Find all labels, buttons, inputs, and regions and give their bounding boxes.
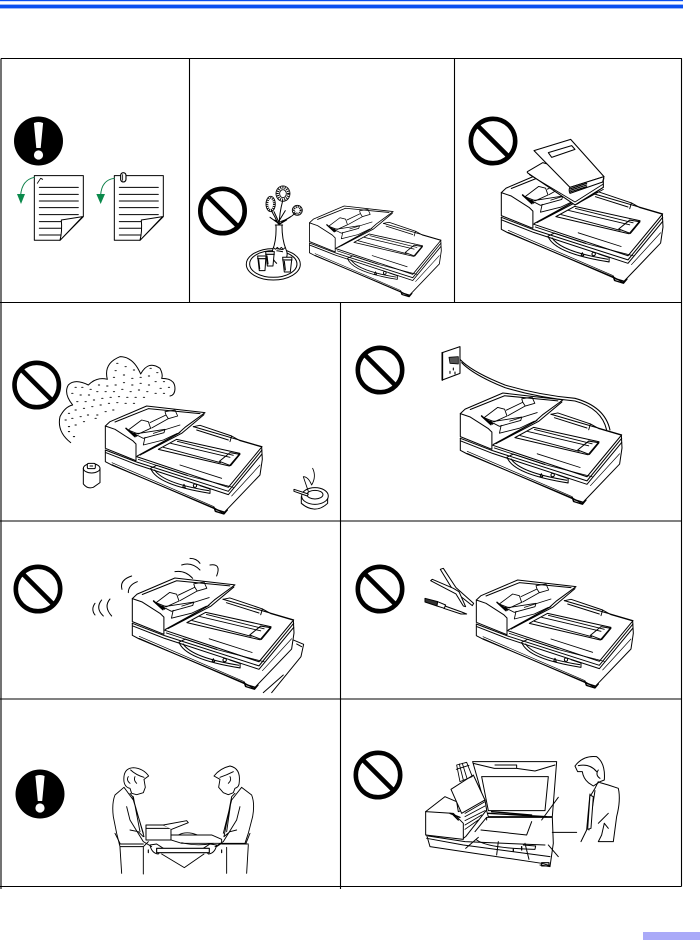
panel: smoke and dust [14,357,328,514]
panel: two people carrying [16,766,254,874]
icon: prohibited [471,119,515,163]
icon: prohibited [356,753,400,797]
illustration: ashtray with cigarette [294,468,328,509]
icon: prohibited [358,567,402,611]
illustration: scanner [132,578,294,689]
illustration: dust cloud [59,357,175,443]
illustration: scanner [105,406,262,514]
icon: exclamation [14,116,63,166]
panel: open cover viewing [356,753,619,867]
icon: exclamation [16,770,64,818]
panel: paper warning [14,116,163,240]
illustration: bottle [83,463,100,488]
icon: prohibited [358,348,402,392]
icon: prohibited [14,363,59,407]
illustration: scissors and screwdriver [425,568,474,614]
illustration: scanner [460,393,622,504]
illustration: vase and cups on tray [246,186,302,280]
panel: objects on scanner [471,119,663,283]
panel: vibration [16,558,304,693]
illustration: vibration marks [93,558,218,616]
illustration: scanner [501,172,663,283]
illustration: scanner [309,206,441,297]
illustration: folded and clipped sheets [17,173,163,240]
icon: prohibited [200,189,245,233]
panel: tools [358,567,633,688]
illustration: open scanner [426,756,619,867]
page tab [643,932,700,940]
illustration: stacked books [527,139,604,205]
panel: power cord [358,347,622,504]
panel: liquids near scanner [200,186,441,297]
illustration: outlet and cord [442,347,610,430]
illustration: uneven stand [263,638,304,693]
illustration: two people lifting scanner [113,766,254,874]
top blue rule [0,0,683,8]
illustration: scanner [476,580,633,688]
icon: prohibited [16,567,60,611]
